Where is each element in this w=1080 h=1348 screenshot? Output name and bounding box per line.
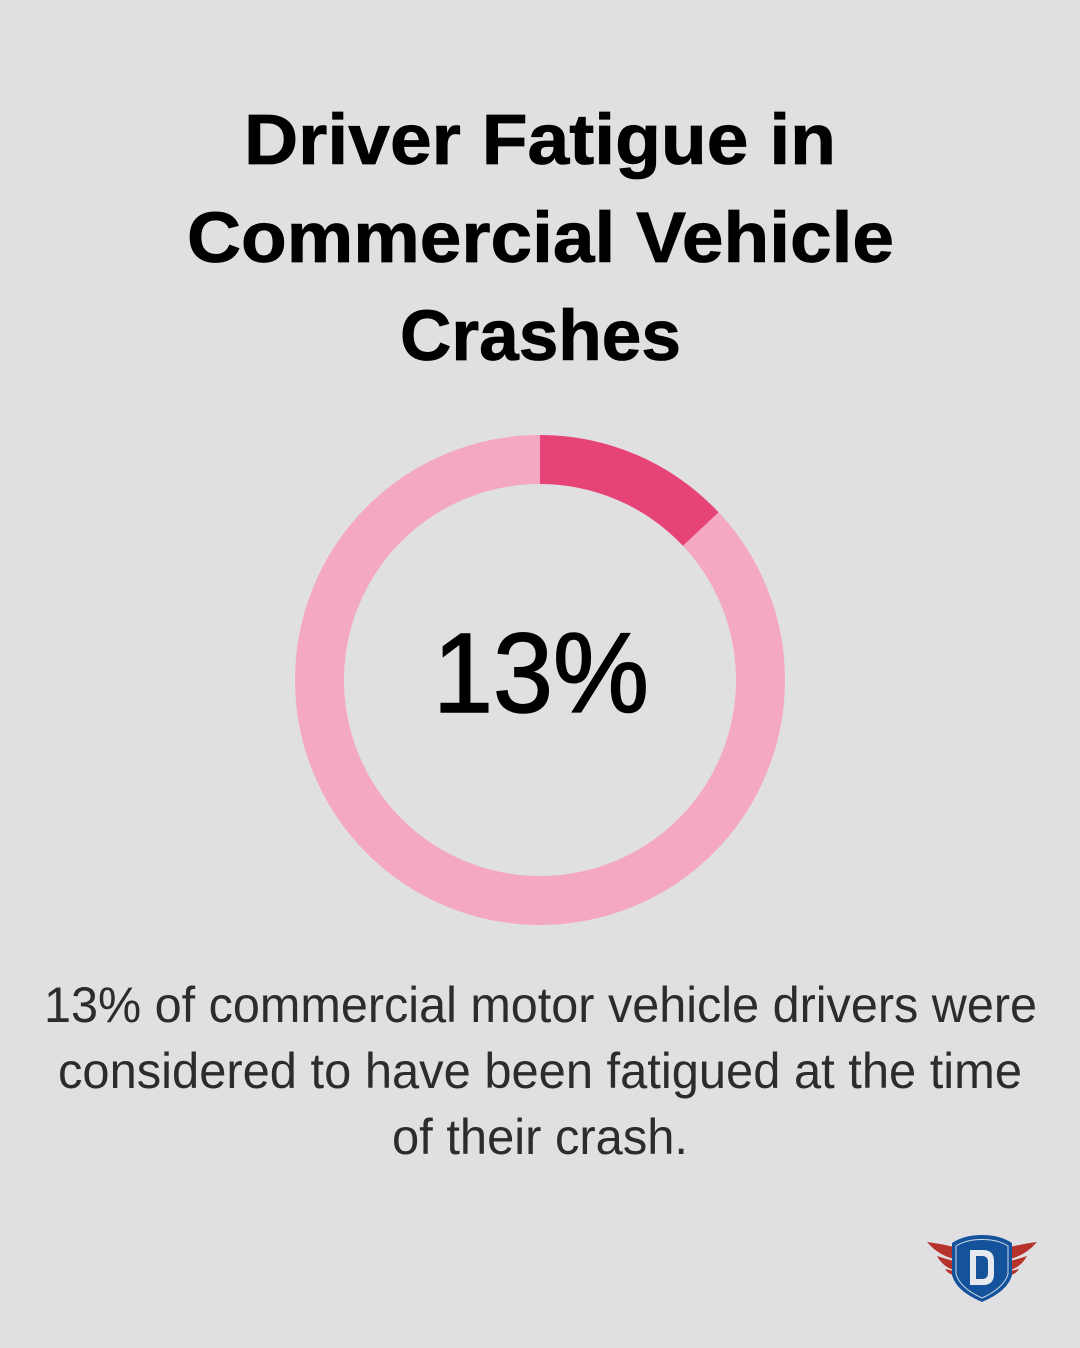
- description text: 13% of commercial motor vehicle drivers were: [44, 977, 1037, 1033]
- shield: [952, 1235, 1012, 1302]
- title: Driver Fatigue in: [244, 101, 836, 180]
- letter D: [970, 1250, 994, 1285]
- center value: 13%: [433, 610, 649, 736]
- shield inner outline: [956, 1240, 1008, 1298]
- donut chart: 13 percent: [320, 435, 760, 900]
- remaining share ring: [320, 460, 760, 900]
- highlighted 13 percent segment: [540, 435, 719, 546]
- description text: of their crash.: [392, 1109, 688, 1165]
- title: [187, 101, 894, 376]
- right wing: [1010, 1242, 1037, 1275]
- title: Crashes: [400, 297, 681, 376]
- description text: considered to have been fatigued at the time: [58, 1043, 1022, 1099]
- title: Commercial Vehicle: [187, 199, 894, 278]
- icon: winged shield logo: [927, 1235, 1037, 1302]
- description text: [44, 977, 1037, 1165]
- left wing: [927, 1242, 954, 1275]
